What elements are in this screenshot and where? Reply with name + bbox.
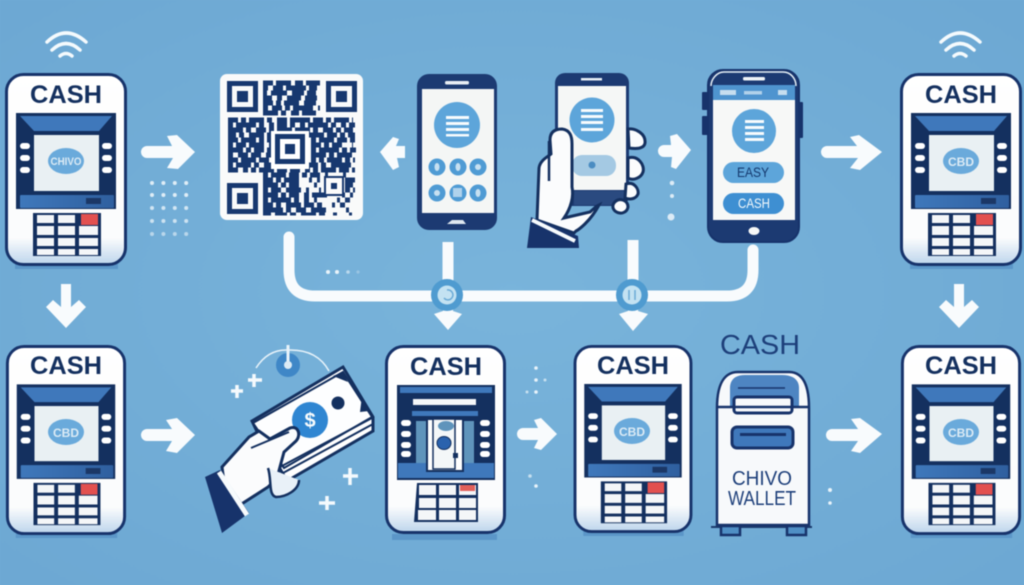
Chivo Wallet box <box>711 372 812 535</box>
ATM: top left: CHIVO <box>50 156 82 168</box>
fingers <box>613 129 645 213</box>
dots: under QR <box>326 270 360 274</box>
arrow: ATM to QR <box>141 135 195 169</box>
arrow: ATM to cash hand <box>141 418 195 453</box>
ATM: top right <box>902 74 1020 269</box>
arrow: phone to QR <box>380 137 405 170</box>
ATM: bottom right: CBD <box>948 426 974 440</box>
label: CASH above wallet box: CASH <box>720 329 800 360</box>
ATM: top right: CASH <box>925 81 997 109</box>
QR code <box>220 74 363 220</box>
dots: bottom centre <box>526 366 546 488</box>
ATM: bottom left: CBD <box>53 426 79 440</box>
phone: wallet app: CASH <box>738 195 770 211</box>
ATM: bottom right: CASH <box>925 352 997 380</box>
ATM: bottom right <box>902 346 1020 538</box>
icon: wifi signal right <box>941 33 980 56</box>
ATM: dispensing cash <box>386 346 504 540</box>
icon: wifi signal left <box>47 33 86 56</box>
dots: bottom right <box>828 488 832 505</box>
arrow: hand phone to wallet phone <box>658 134 691 169</box>
phone: wallet app: EASY <box>737 164 770 180</box>
ATM: bottom left: CASH <box>30 352 102 380</box>
ATM: bottom fourth: CBD <box>619 425 645 439</box>
ATM: top left: CASH <box>30 81 102 109</box>
phone: wallet app <box>702 70 803 242</box>
arrow: phone to ATM <box>821 135 882 170</box>
hand holding cash: $ <box>304 410 316 432</box>
hand <box>222 427 299 512</box>
phone: app menu <box>417 74 497 230</box>
arrow: top right down <box>939 284 979 328</box>
connector flow <box>289 237 753 331</box>
arrow: top left down <box>46 284 86 328</box>
arrow: wallet box to ATM <box>826 418 882 453</box>
dots: top left <box>152 183 188 234</box>
Chivo Wallet box: WALLET <box>728 488 796 510</box>
ATM: top left <box>6 74 126 269</box>
Chivo Wallet box: CHIVO <box>732 468 792 490</box>
dots: vertical <box>668 181 674 220</box>
ATM: bottom fourth <box>575 346 691 536</box>
ATM: dispensing cash: CASH <box>410 353 482 381</box>
ATM: bottom fourth: CASH <box>597 352 669 380</box>
arrow: cash ATM to ATM <box>517 418 557 450</box>
ATM: top right: CBD <box>948 155 974 169</box>
phone held in hand <box>527 73 645 248</box>
ATM: bottom left <box>7 346 125 538</box>
icon: coin arc with sparkles <box>231 345 358 510</box>
hand holding cash <box>205 367 373 533</box>
